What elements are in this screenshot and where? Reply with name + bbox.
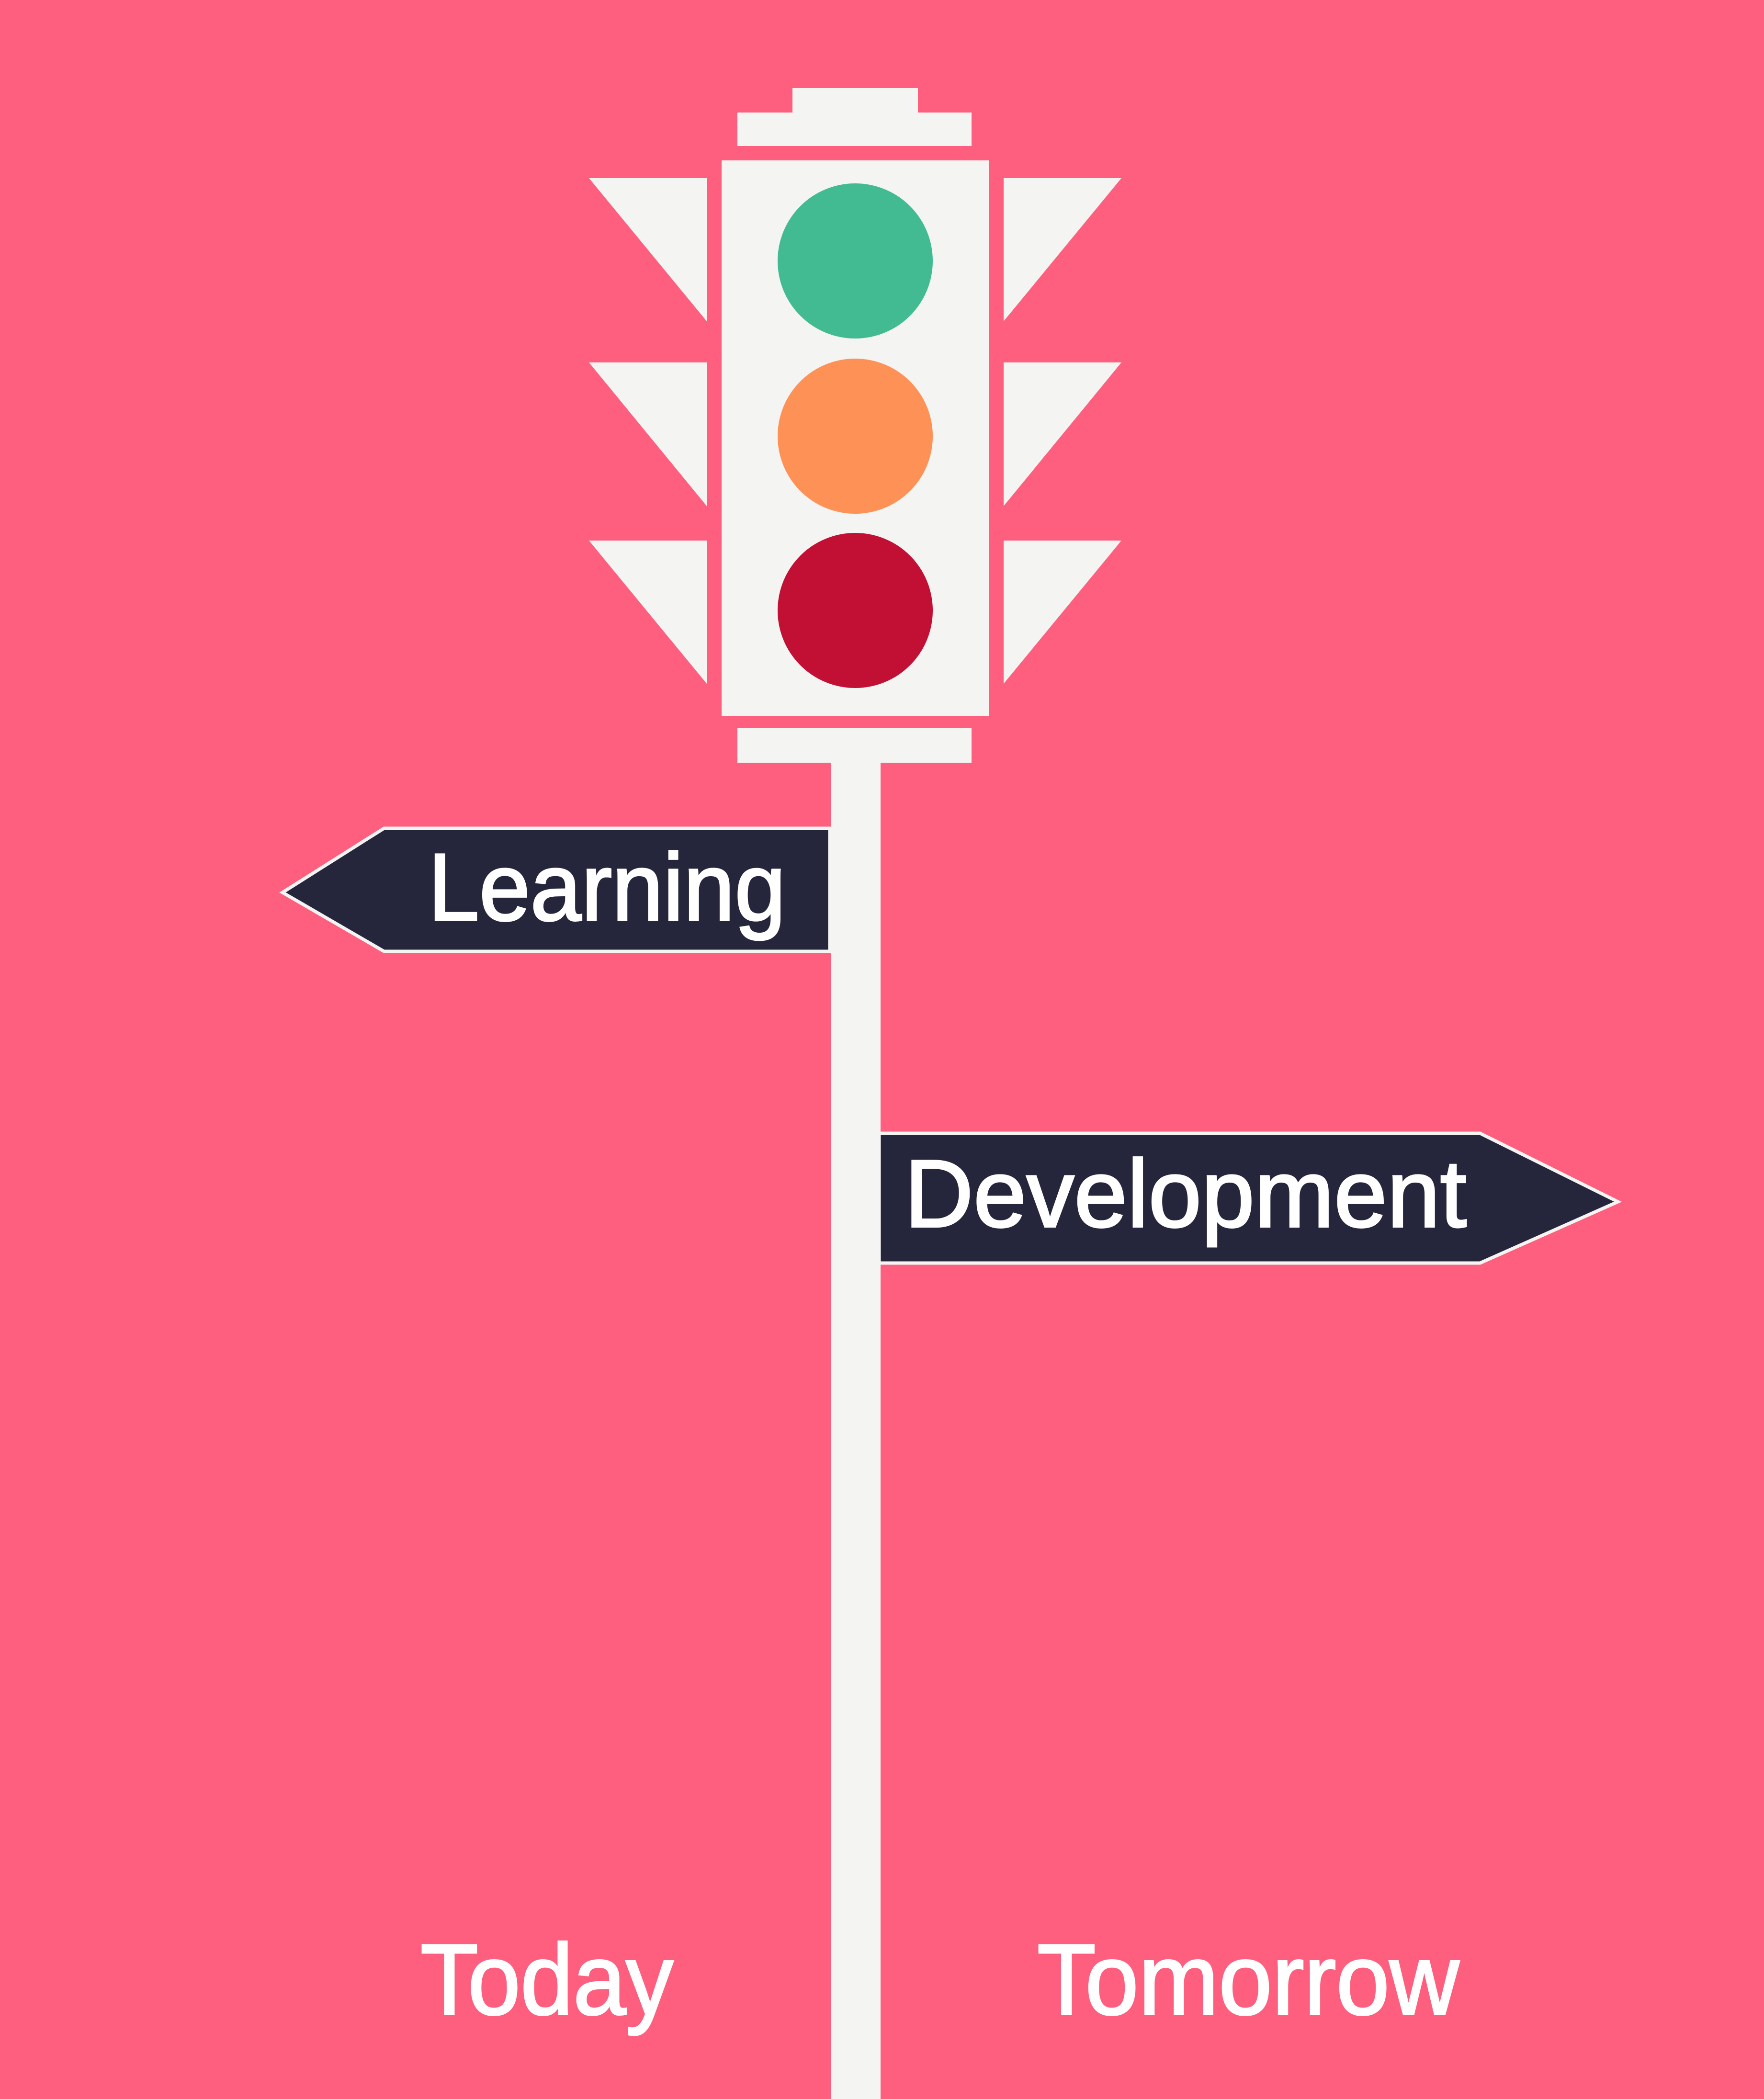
traffic light	[589, 88, 1121, 763]
orange light	[778, 359, 933, 514]
traffic light left visors	[589, 178, 707, 684]
traffic light body	[722, 160, 989, 716]
traffic light right visors	[1004, 178, 1121, 684]
label: Development: Development	[905, 1140, 1467, 1247]
red light	[778, 533, 933, 688]
traffic light top cap	[737, 88, 972, 146]
sign: Learning (arrow left)	[283, 828, 830, 951]
sign: Development (arrow right)	[879, 1133, 1618, 1263]
pole	[831, 763, 881, 2099]
label: Learning: Learning	[428, 834, 786, 941]
label: Tomorrow: Tomorrow	[1037, 1923, 1459, 2036]
green light	[778, 183, 933, 339]
traffic light bottom bracket	[737, 728, 972, 763]
label: Today: Today	[420, 1923, 673, 2036]
